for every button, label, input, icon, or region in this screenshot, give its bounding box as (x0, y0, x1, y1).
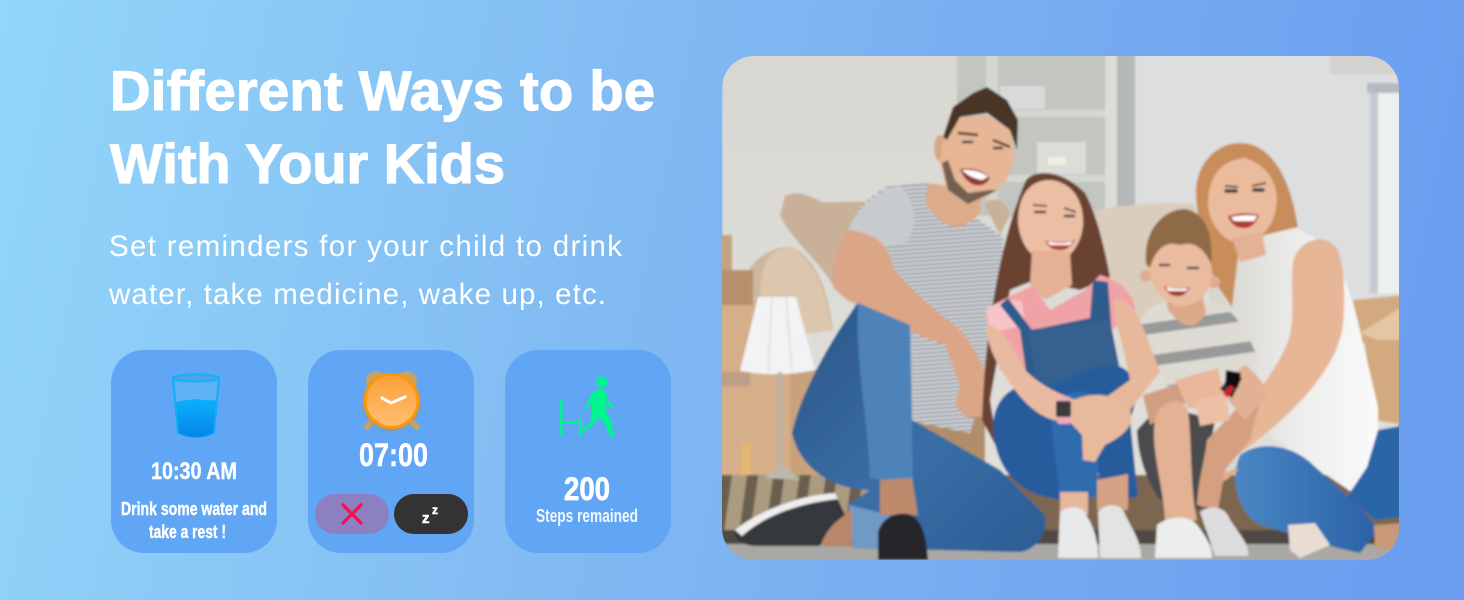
panel: drink water reminder (111, 350, 277, 553)
button: snooze (394, 494, 468, 534)
title: With Your Kids (110, 132, 505, 195)
icon: alarm clock (364, 371, 420, 431)
reminder message: take a rest ! (149, 522, 226, 542)
photo: smiling family sitting on the floor (716, 50, 1405, 565)
button: snooze: z (432, 503, 438, 517)
floor lamp (740, 297, 815, 480)
boy (1137, 209, 1267, 558)
panel: steps goal (505, 350, 671, 553)
girl (982, 173, 1161, 558)
button: snooze: z (422, 510, 430, 527)
alarm time: 07:00 (359, 437, 428, 473)
title (110, 59, 655, 195)
icon: person walking away from chair (560, 376, 614, 437)
title: Different Ways to be (110, 59, 655, 122)
step label: Steps remained (536, 506, 638, 526)
subtitle text: water, take medicine, wake up, etc. (108, 278, 606, 311)
step count: 200 (564, 471, 610, 507)
icon: glass of water (172, 374, 220, 437)
man (735, 87, 1045, 560)
subtitle text (108, 230, 622, 311)
subtitle text: Set reminders for your child to drink (109, 230, 622, 263)
sofa and cushions (743, 193, 1205, 340)
panel: alarm clock (308, 350, 474, 553)
woman (1194, 142, 1399, 559)
reminder time: 10:30 AM (151, 458, 237, 485)
reminder message (121, 499, 267, 542)
room background (722, 56, 1399, 477)
reminder message: Drink some water and (121, 499, 267, 519)
cardboard boxes and floor (716, 235, 1405, 565)
button: dismiss (315, 494, 389, 534)
